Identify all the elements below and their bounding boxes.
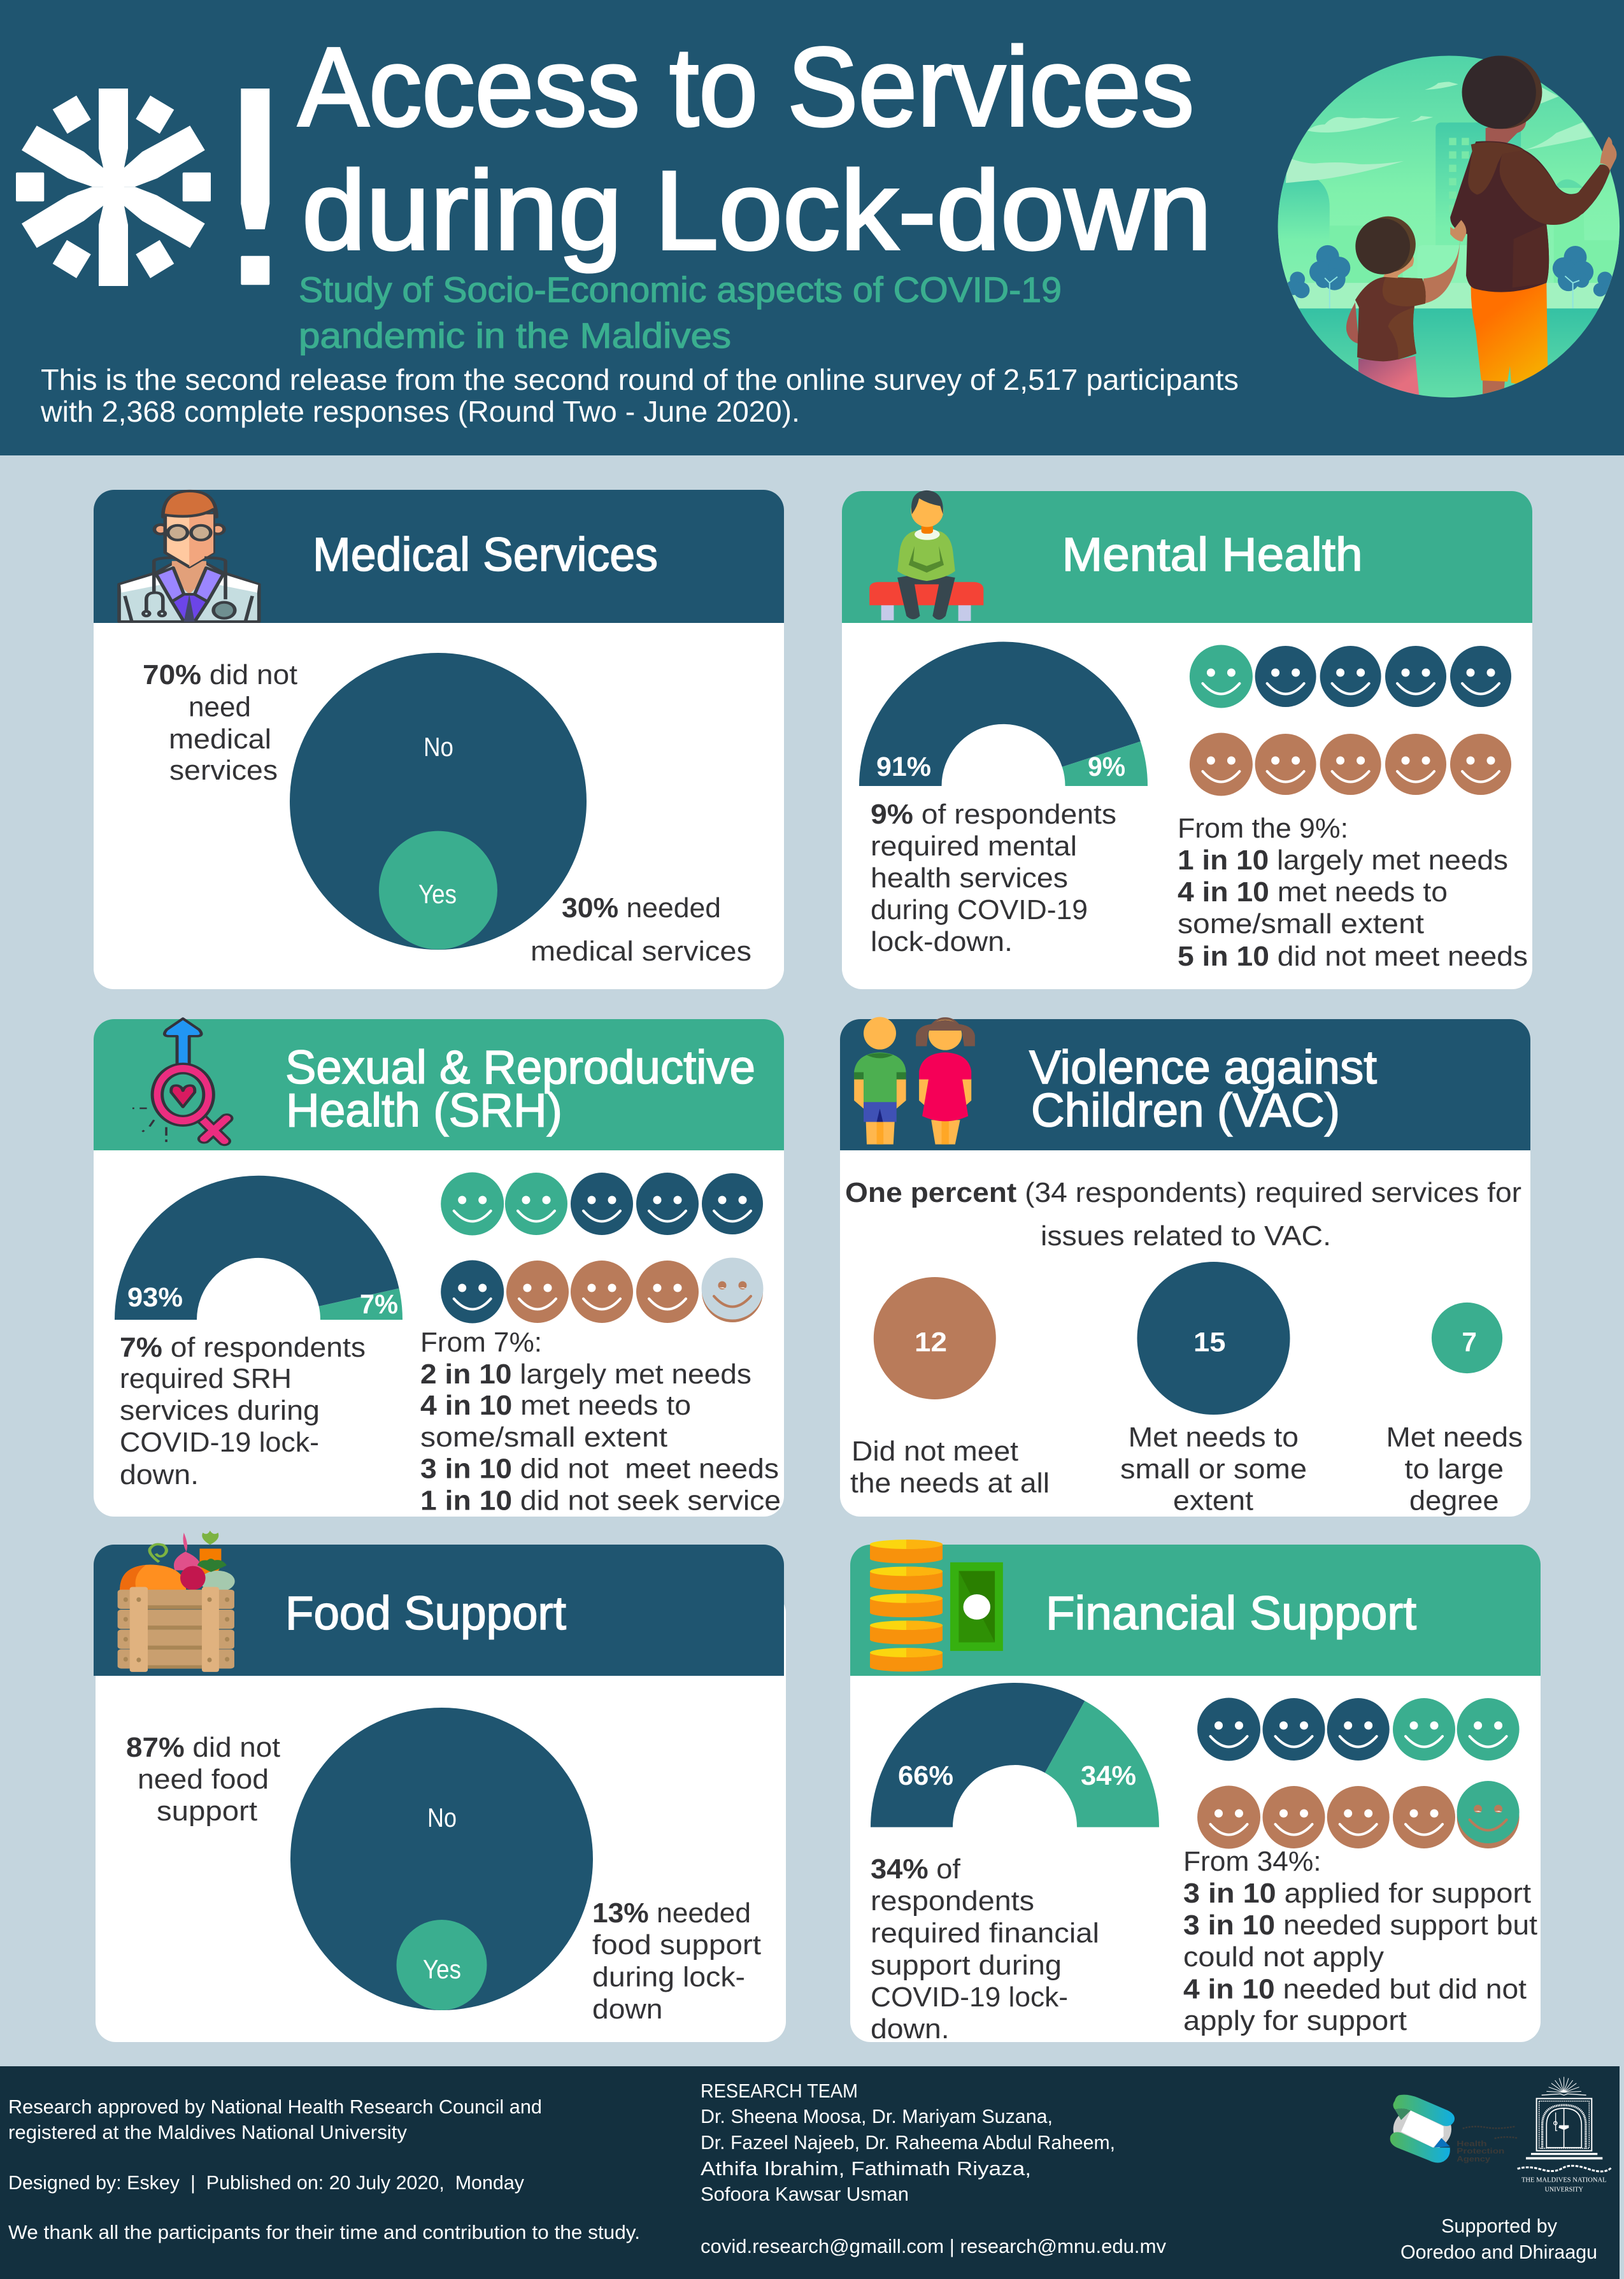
chart: nested circles no/yes: No	[427, 1803, 457, 1832]
text: approvals and credits: Designed by: Eskey | Published on: 20 July 2020, Monday	[8, 2171, 524, 2194]
subtitle: pandemic in the Maldives	[299, 315, 731, 355]
logo: the maldives national university: UNIVERSITY	[1545, 2187, 1583, 2194]
text: supported by: Supported by	[1441, 2215, 1557, 2237]
heading: financial support: Financial Support	[1046, 1587, 1416, 1640]
text: 30% needed: 30% needed	[562, 892, 721, 924]
text: 7% of respondents: 7% of respondents	[120, 1332, 366, 1363]
text: met needs to small: small or some	[1120, 1454, 1307, 1485]
title: during Lock-down	[302, 148, 1212, 273]
text: 34% of respondents	[871, 1854, 1099, 2045]
text: research team: covid.research@gmaill.com | research@mnu.edu.mv	[701, 2235, 1166, 2257]
text: met needs to large: to large	[1405, 1454, 1504, 1485]
text: 13% needed: 13% needed	[592, 1897, 751, 1929]
icon: smiley row, brown and green	[1197, 1781, 1520, 1848]
heading: SRH: Health (SRH)	[286, 1084, 562, 1137]
text: 87% did not need	[126, 1732, 280, 1827]
chart: bubble 7	[1432, 1303, 1502, 1373]
text: 87% did not need: 87% did not	[126, 1732, 280, 1763]
text: 70% did not need: medical	[169, 724, 271, 755]
intro text: This is the second release from the second round of the online survey of 2,517 participants	[41, 363, 1239, 396]
text: from 34%: 3 in 10 needed support but	[1183, 1910, 1537, 1941]
panel: sexual and reproductive health	[94, 1018, 784, 1517]
adult figure	[1450, 55, 1616, 292]
text: from the 9%: 5 in 10 did not meet needs	[1178, 941, 1528, 972]
text: met needs to large: Met needs	[1386, 1422, 1523, 1453]
chart: half donut 91% / 9%: 9%	[1088, 752, 1125, 782]
icon: boy and girl	[854, 1017, 975, 1145]
text: 13% needed: down	[592, 1994, 662, 2025]
logo: the maldives national university: THE MALDIVES NATIONAL	[1521, 2177, 1607, 2184]
text: 7% of respondents: services during	[120, 1395, 320, 1426]
chart: nested circles no/yes: Yes	[423, 1954, 461, 1984]
logo: health protection agency: Agency	[1457, 2154, 1490, 2163]
chart: bubble 12: 12	[915, 1327, 947, 1358]
text: from 7%: From 7%:	[420, 1327, 542, 1358]
text: 7% of respondents: required SRH	[120, 1363, 292, 1394]
text: 9% of respondents: required mental	[871, 831, 1077, 862]
text: supported by	[1400, 2215, 1597, 2263]
chart: bubble 7: 7	[1462, 1327, 1477, 1358]
icon: smiley row, 1 in 10	[1190, 645, 1511, 708]
icon: smiley row, 2 in 10	[441, 1172, 763, 1236]
text: met needs to small: Met needs to	[1129, 1422, 1299, 1453]
text: research team: RESEARCH TEAM	[701, 2080, 858, 2102]
text: 13% needed: food support	[592, 1929, 761, 1961]
text: from 7%	[420, 1327, 781, 1517]
text: research team: Dr. Sheena Moosa, Dr. Mariyam Suzana,	[701, 2105, 1053, 2127]
text: research team: Athifa Ibrahim, Fathimath Riyaza,	[701, 2157, 1031, 2180]
text: 9% of respondents: health services	[871, 862, 1068, 894]
text: one percent	[845, 1177, 1521, 1252]
panel: medical services	[94, 490, 784, 989]
title: Access to Services	[298, 25, 1194, 150]
heading: SRH	[285, 1041, 755, 1137]
icon: doctor	[119, 491, 259, 622]
text: met needs to small	[1120, 1422, 1307, 1517]
chart: half donut 66% / 34%	[871, 1683, 1159, 1827]
text: 13% needed	[592, 1897, 761, 2025]
text: from 7%: 4 in 10 met needs to	[420, 1390, 691, 1421]
text: research team: Dr. Fazeel Najeeb, Dr. Raheema Abdul Raheem,	[701, 2131, 1115, 2154]
text: 87% did not need: need food	[138, 1764, 269, 1795]
text: did not meet: Did not meet	[851, 1436, 1018, 1467]
illustration: adult and child looking at city	[1276, 54, 1622, 399]
text: met needs to large	[1386, 1422, 1523, 1517]
text: 34% of respondents: 34% of	[871, 1854, 961, 1885]
panel: food support	[94, 1531, 786, 2042]
text: approvals and credits: registered at the Maldives National University	[8, 2121, 408, 2143]
text: from 34%: From 34%:	[1183, 1846, 1321, 1877]
text: 7% of respondents: COVID-19 lock-	[120, 1427, 319, 1458]
chart: bubble 15	[1137, 1262, 1290, 1415]
chart: half donut 93% / 7%: 7%	[360, 1289, 398, 1320]
subtitle	[299, 269, 1062, 355]
chart: bubble 15: 15	[1193, 1327, 1225, 1358]
text: 7% of respondents: down.	[120, 1459, 199, 1490]
chart: nested circles no/yes	[290, 653, 587, 950]
text: 9% of respondents	[871, 799, 1116, 957]
chart: half donut 93% / 7%	[115, 1176, 402, 1320]
heading: SRH: Sexual & Reproductive	[285, 1041, 755, 1094]
title	[298, 25, 1212, 273]
icon: gender symbols with heart	[132, 1018, 227, 1142]
text: 34% of respondents: down.	[871, 2013, 950, 2045]
footer	[0, 2066, 1620, 2279]
icon: crate of vegetables	[118, 1531, 235, 1672]
child figure	[1346, 217, 1466, 361]
logo: the maldives national university	[1518, 2077, 1611, 2194]
chart: nested circles no/yes: Yes	[418, 879, 457, 909]
icon: smiley row, brown	[1190, 732, 1511, 796]
text: from the 9%: 1 in 10 largely met needs	[1178, 845, 1508, 876]
text: from 34%: apply for support	[1183, 2005, 1407, 2036]
subtitle: Study of Socio-Economic aspects of COVID-19	[299, 269, 1062, 310]
chart: bubble 12	[874, 1277, 996, 1399]
text: met needs to large: degree	[1409, 1485, 1499, 1517]
text: 70% did not need: services	[169, 755, 278, 786]
text: did not meet: the needs at all	[850, 1468, 1050, 1499]
text: from 34%	[1183, 1846, 1537, 2036]
panel: financial support	[850, 1540, 1541, 2045]
header band	[0, 0, 1624, 455]
text: 70% did not need	[143, 659, 297, 786]
text: from 7%: 3 in 10 did not meet needs	[420, 1454, 779, 1485]
text: from the 9%: 4 in 10 met needs to	[1178, 876, 1448, 908]
text: from the 9%: From the 9%:	[1178, 813, 1348, 844]
heading: VAC	[1029, 1041, 1377, 1137]
heading: VAC: Children (VAC)	[1031, 1084, 1340, 1137]
chart: half donut 91% / 9%	[859, 642, 1148, 786]
chart: half donut 93% / 7%: 93%	[127, 1282, 183, 1313]
icon: coins and banknote	[870, 1540, 1003, 1671]
text: supported by: Ooredoo and Dhiraagu	[1400, 2241, 1597, 2263]
text: one percent: issues related to VAC.	[1041, 1220, 1331, 1252]
text: 87% did not need: support	[157, 1796, 257, 1827]
text: from 7%: 2 in 10 largely met needs	[420, 1359, 751, 1390]
text: research team: Sofoora Kawsar Usman	[701, 2183, 909, 2205]
text: 9% of respondents: during COVID-19	[871, 894, 1088, 925]
text: from 34%: could not apply	[1183, 1941, 1384, 1973]
text: 34% of respondents: required financial	[871, 1918, 1099, 1949]
icon: starburst with exclamation mark	[16, 89, 269, 286]
chart: nested circles no/yes	[290, 1708, 593, 2010]
text: did not meet	[850, 1436, 1050, 1499]
heading: VAC: Violence against	[1029, 1041, 1377, 1094]
text: 34% of respondents: COVID-19 lock-	[871, 1982, 1068, 2013]
heading: medical services: Medical Services	[313, 528, 658, 581]
text: 34% of respondents: respondents	[871, 1885, 1034, 1917]
logo: health protection agency: Health	[1457, 2139, 1487, 2148]
text: 70% did not need: need	[189, 692, 251, 722]
text: from 7%: 1 in 10 did not seek service	[420, 1485, 781, 1517]
text: 9% of respondents: 9% of respondents	[871, 799, 1116, 830]
text: from the 9%	[1178, 813, 1528, 972]
text: from 34%: 4 in 10 needed but did not	[1183, 1973, 1527, 2005]
chart: half donut 66% / 34%: 66%	[898, 1761, 953, 1791]
intro text	[40, 363, 1239, 428]
icon: person on bench	[869, 490, 983, 621]
text: 9% of respondents: lock-down.	[871, 926, 1013, 957]
icon: smiley row, 3 in 10	[1197, 1698, 1520, 1761]
chart: half donut 66% / 34%: 34%	[1081, 1761, 1136, 1791]
text: research team	[701, 2080, 1166, 2257]
text: one percent: One percent (34 respondents) required services for	[845, 1177, 1521, 1208]
text: met needs to small: extent	[1173, 1485, 1253, 1517]
heading: food support: Food Support	[285, 1587, 566, 1640]
text: from the 9%: some/small extent	[1178, 908, 1424, 939]
panel: violence against children	[840, 1017, 1530, 1517]
panel: mental health	[842, 490, 1532, 989]
heading: mental health: Mental Health	[1062, 528, 1363, 581]
text: approvals and credits: Research approved by National Health Research Council and	[8, 2096, 542, 2118]
chart: half donut 91% / 9%: 91%	[876, 752, 931, 782]
text: 13% needed: during lock-	[592, 1962, 745, 1993]
text: 70% did not need: 70% did not	[143, 659, 297, 690]
text: from 7%: some/small extent	[420, 1422, 667, 1453]
text: from 34%: 3 in 10 applied for support	[1183, 1878, 1531, 1909]
text: 7% of respondents	[120, 1332, 366, 1490]
intro text: with 2,368 complete responses (Round Two - June 2020).	[40, 395, 800, 428]
text: approvals and credits	[8, 2096, 640, 2243]
icon: smiley row, mixed	[441, 1257, 763, 1324]
logo: health protection agency	[1390, 2095, 1518, 2163]
text: 30% needed: medical services	[531, 936, 751, 967]
chart: nested circles no/yes: No	[424, 732, 453, 762]
text: approvals and credits: We thank all the participants for their time and contribution to the study.	[8, 2221, 640, 2243]
city scene in circle	[1276, 54, 1622, 399]
text: 30% needed	[531, 892, 751, 967]
text: 34% of respondents: support during	[871, 1950, 1062, 1981]
logo: health protection agency: Protection	[1457, 2147, 1504, 2155]
